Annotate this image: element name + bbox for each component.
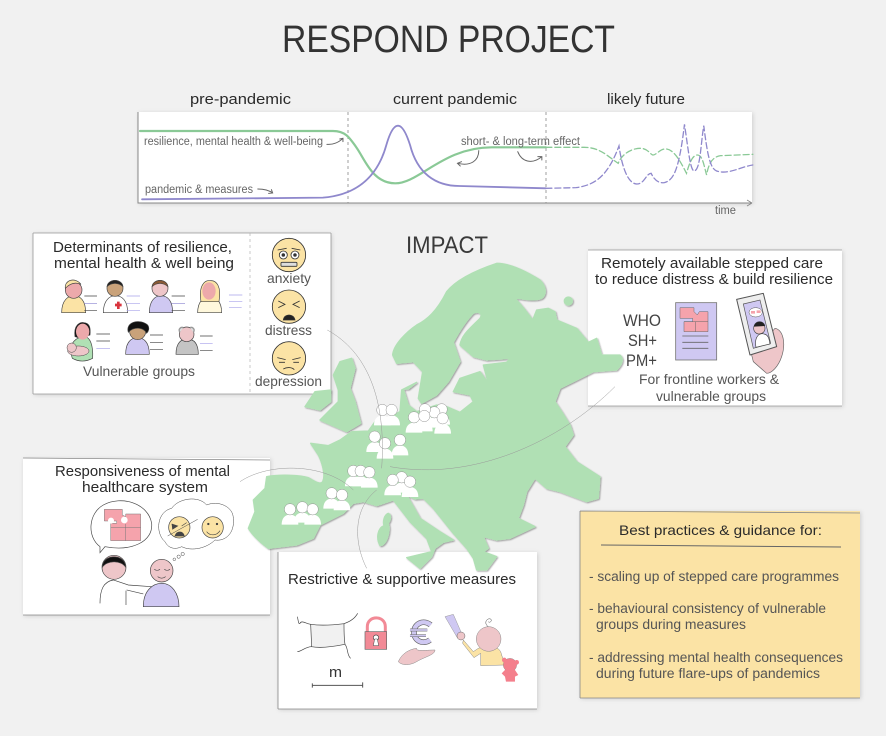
face: depression — [272, 342, 306, 375]
person 1 — [62, 280, 97, 313]
face: distress — [272, 290, 306, 323]
target group text: vulnerable groups — [656, 388, 766, 404]
person 2 — [103, 280, 140, 313]
small arrows — [258, 138, 542, 193]
curves — [140, 124, 753, 199]
measures heading: Restrictive & supportive measures — [288, 572, 516, 588]
icon: euro and hand — [398, 622, 435, 665]
period headings — [190, 92, 685, 108]
heading: impact: IMPACT — [406, 232, 488, 259]
icon: manual booklet — [676, 303, 717, 360]
emotion faces — [272, 238, 306, 375]
chart panel — [138, 112, 752, 203]
cluster: netherlands — [374, 404, 400, 425]
best practices list: during future flare-ups of pandemics — [596, 666, 820, 681]
best practices list: - scaling up of stepped care programmes — [589, 569, 839, 584]
people clusters — [282, 404, 451, 525]
great britain — [320, 358, 361, 432]
measures icons — [297, 613, 519, 688]
best practices list: groups during measures — [596, 617, 746, 632]
responsiveness heading — [55, 464, 230, 496]
emotion labels: distress — [265, 322, 312, 338]
cluster: italy — [384, 472, 418, 497]
purple curve: pandemic — [142, 126, 546, 199]
person 7 — [176, 327, 213, 354]
programme names: WHO — [623, 312, 661, 330]
speech bubble with puzzle — [91, 501, 152, 553]
cluster: poland — [406, 404, 451, 434]
panel: restrictive measures — [278, 552, 537, 709]
stepped care heading — [595, 256, 833, 288]
programme names: PM+ — [626, 352, 657, 370]
connector lines — [240, 330, 615, 568]
chart labels: short- & long-term effect — [461, 136, 581, 148]
thought cloud with faces — [159, 499, 233, 561]
target group text: For frontline workers & — [639, 371, 780, 387]
panel: stepped care — [588, 250, 842, 406]
two people — [100, 555, 179, 607]
title: RESPOND PROJECT — [282, 19, 615, 61]
icon: padlock — [365, 618, 387, 649]
programme names — [623, 312, 661, 370]
green curve: resilience — [140, 131, 546, 183]
icon: parent and child with teddy — [445, 614, 519, 682]
dashed green future — [546, 147, 753, 175]
distance label: m — [329, 664, 342, 681]
determinants heading: mental health & well being — [54, 256, 234, 272]
emotion labels — [255, 270, 322, 389]
cluster: germany — [366, 431, 408, 459]
map of Europe — [240, 263, 622, 570]
cluster: spain — [282, 502, 321, 525]
illustration: care conversation — [91, 499, 233, 607]
period headings: likely future — [607, 92, 685, 108]
period headings: pre-pandemic — [190, 92, 291, 108]
landmass — [248, 263, 622, 570]
dashed purple future — [546, 124, 753, 188]
period headings: current pandemic — [393, 92, 517, 108]
icon: phone in hand — [737, 293, 784, 373]
chart labels: time — [715, 205, 736, 217]
panel: determinants — [33, 233, 331, 394]
stepped care heading: to reduce distress & build resilience — [595, 272, 833, 288]
corsica and sardinia — [378, 513, 390, 546]
vulnerable groups label: Vulnerable groups — [83, 363, 195, 379]
person 4 — [198, 281, 242, 313]
face: anxiety — [272, 238, 306, 272]
person 6 — [126, 322, 163, 354]
person 5 with baby — [67, 322, 110, 361]
icon: quarantine room — [297, 613, 363, 688]
determinants heading: Determinants of resilience, — [53, 240, 232, 256]
cluster: france — [345, 465, 378, 488]
vulnerable group icons — [62, 280, 242, 361]
responsiveness heading: Responsiveness of mental — [55, 464, 230, 480]
best practices list: - behavioural consistency of vulnerable — [589, 601, 826, 616]
emotion labels: anxiety — [267, 270, 311, 286]
best practices list — [589, 569, 843, 681]
cluster: catalonia — [323, 488, 350, 510]
small island — [564, 297, 572, 305]
programme names: SH+ — [628, 332, 657, 350]
timeline chart — [138, 92, 753, 217]
panel: best practices — [580, 511, 860, 698]
best practices heading: Best practices & guidance for: — [619, 522, 822, 538]
emotion labels: depression — [255, 373, 322, 389]
person 3 — [149, 280, 185, 313]
panel: responsiveness — [23, 458, 270, 615]
best practices list: - addressing mental health consequences — [589, 650, 843, 665]
determinants heading — [53, 240, 234, 272]
stepped care heading: Remotely available stepped care — [601, 256, 823, 272]
responsiveness heading: healthcare system — [82, 480, 208, 496]
chart labels: resilience, mental health & well-being — [144, 136, 323, 148]
chart labels: pandemic & measures — [145, 184, 253, 196]
chart labels — [144, 136, 736, 217]
target group text — [639, 371, 780, 404]
ireland — [305, 390, 331, 410]
mainland — [248, 263, 622, 570]
